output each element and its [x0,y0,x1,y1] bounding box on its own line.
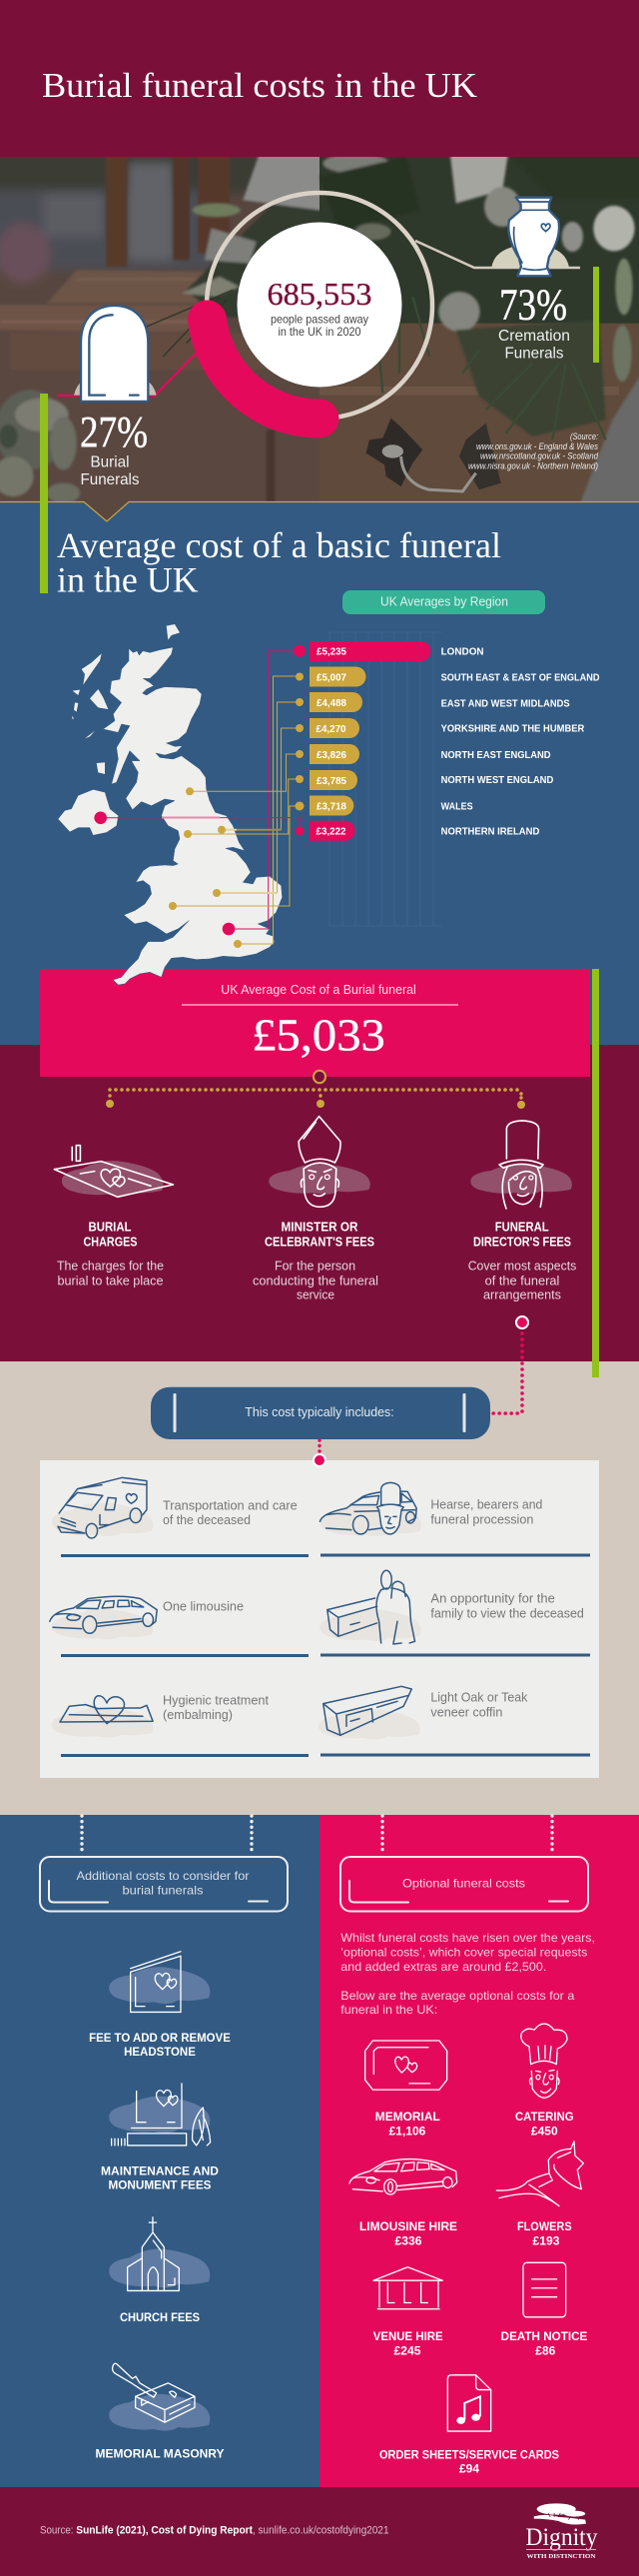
connector: cremation [415,241,580,268]
item: coffin [319,1686,528,1739]
item: order sheets [379,2375,559,2476]
row: London: LONDON [441,646,484,658]
pink donut segment [208,320,320,419]
regional connector lines [101,651,300,944]
column: minister fees [253,1117,378,1302]
source note: (Source: [570,431,598,442]
heading: minister fees: MINISTER OR [282,1220,358,1235]
icon: limousine [349,2159,457,2194]
heading box: optional costs: Optional funeral costs [402,1876,525,1890]
item: venue hire [373,2267,443,2357]
label [375,2112,440,2139]
heading box: additional costs [40,1857,288,1912]
text: director fees: arrangements [483,1288,561,1302]
heading box: optional costs [340,1857,588,1912]
chart grid [329,632,442,926]
label [515,2112,574,2139]
intro text: and added extras are around £2,500. [340,1960,546,1974]
text: Light Oak or Teak [430,1691,528,1705]
text: burial charges: The charges for the [57,1260,164,1274]
label: MEMORIAL [375,2112,440,2124]
text [163,1694,270,1722]
icon: chisel and stone [109,2363,210,2431]
burial vs cremation statistics [57,193,599,488]
label: MAINTENANCE AND [101,2165,219,2177]
label: £1,106 [389,2127,425,2139]
source note: www.nisra.gov.uk - Northern Ireland) [468,461,598,472]
burial label: Funerals [80,471,140,488]
row: Northern Ireland [296,821,540,841]
text: of the deceased [163,1513,251,1527]
icon: headstone [74,306,157,402]
cremation label: Funerals [505,346,563,362]
UK map [58,624,283,985]
panel: optional costs [320,1815,639,2487]
heading: minister fees: CELEBRANT'S FEES [265,1234,374,1249]
burial percentage: 27% [80,408,148,456]
text: An opportunity for the [430,1592,555,1606]
Scottish islands [72,624,180,774]
label: ORDER SHEETS/SERVICE CARDS [379,2449,559,2461]
panel: additional costs [0,1815,320,2487]
item: embalming [52,1694,270,1738]
wordmark: Dignity [525,2524,598,2551]
intro text: funeral in the UK: [340,2003,437,2017]
heading: burial charges: CHARGES [84,1234,138,1249]
heading box: additional costs: burial funerals [122,1884,204,1898]
heading: burial charges: BURIAL [88,1220,132,1235]
label [379,2449,559,2476]
item: family viewing [320,1570,584,1644]
text [430,1498,542,1527]
text: Hygienic treatment [163,1694,270,1708]
row: South East [296,667,600,687]
deaths caption [271,312,368,339]
row: Wales: WALES [441,801,473,813]
map markers [94,787,242,948]
row: North West: £3,785 [317,775,346,787]
label: CATERING [515,2112,574,2124]
item: memorial masonry [96,2363,225,2460]
source line: , sunlife.co.uk/costofdying2021 [253,2525,389,2537]
logo: Dignity [525,2503,598,2560]
icon: music file [447,2375,491,2431]
item: memorial [365,2041,447,2139]
icon: venue [373,2267,442,2309]
average cost box [40,969,590,1077]
deaths caption: in the UK in 2020 [278,325,361,339]
item: headstone fee [89,1952,231,2059]
label [373,2331,443,2357]
text: Transportation and care [163,1499,298,1513]
box caption: UK Average Cost of a Burial funeral [221,982,416,997]
bar chart: regional averages [294,641,600,841]
text: Hearse, bearers and [430,1498,542,1512]
tagline: WITH DISTINCTION [527,2553,596,2560]
text: veneer coffin [430,1705,502,1719]
item: catering [515,2024,574,2139]
row: Wales: £3,718 [317,801,346,813]
row: Northern Ireland: NORTHERN IRELAND [441,826,540,838]
intro text [340,1931,595,2017]
beige section background [0,1361,639,1815]
row: South East: SOUTH EAST & EAST OF ENGLAND [441,671,600,683]
row: South East: £5,007 [317,671,346,683]
icon: headstone [109,1952,210,2012]
icon: hygienic treatment [52,1696,153,1738]
connector: North West [188,779,300,834]
item: maintenance fees [101,2084,219,2192]
connector: North East [190,754,300,791]
row: North East: £3,826 [317,749,346,761]
heading box: additional costs: Additional costs to consider for [76,1869,250,1883]
item: ambulance [52,1477,298,1538]
header band [0,0,639,157]
icon: church [109,2217,210,2290]
connector: London [229,651,300,929]
label [89,2033,231,2059]
text [430,1691,528,1719]
item: church fees [109,2217,210,2324]
row: Yorkshire: £4,270 [316,723,346,735]
label: £94 [459,2464,480,2476]
donut ring [207,193,432,419]
pill: UK averages by region [342,590,545,614]
column: funeral director fees [468,1121,576,1302]
deaths figure: 685,553 [268,276,371,312]
heading: director fees [473,1220,571,1249]
icon: minister [269,1117,370,1207]
row: North East: NORTH EAST ENGLAND [441,749,551,761]
text: minister fees: For the person [275,1260,355,1274]
text [430,1592,584,1620]
deaths caption: people passed away [271,312,368,326]
row: Midlands: £4,488 [317,697,346,709]
burial label [80,453,140,488]
label: £193 [533,2235,559,2247]
heading: minister fees [265,1220,374,1249]
green accent bar: cremation [593,267,599,363]
green accent bar: left [40,394,48,593]
row: North West [296,770,554,790]
label: £245 [393,2345,421,2357]
row: Yorkshire [296,718,585,738]
section: average cost background [0,501,639,1045]
row: Midlands [296,692,570,712]
title: Burial funeral costs in the UK [42,66,477,105]
label: MONUMENT FEES [108,2180,212,2192]
column: burial charges [54,1146,173,1288]
centre circle [238,222,401,388]
label [501,2331,588,2357]
icon: coffin [319,1686,420,1739]
item: limousine [50,1596,244,1639]
text: director fees: Cover most aspects [468,1260,576,1274]
text: director fees [468,1260,576,1302]
label: FEE TO ADD OR REMOVE [89,2033,231,2045]
label: FLOWERS [517,2221,572,2233]
connector: Wales [173,806,300,906]
panel: included items [40,1440,599,1778]
label: MEMORIAL MASONRY [96,2448,225,2460]
icon: monument [109,2084,211,2146]
icon: memorial plaque [365,2041,447,2090]
row: Midlands: EAST AND WEST MIDLANDS [441,697,570,709]
label: £86 [535,2345,555,2357]
pill: UK averages by region: UK Averages by Region [380,594,508,609]
connector: Northern Ireland [101,817,300,831]
source line: Source: [40,2525,74,2537]
row: Wales [296,795,473,815]
burial label: Burial [90,453,130,471]
intro text: Whilst funeral costs have risen over the years, [340,1931,595,1945]
item: hearse [320,1482,542,1536]
maroon section background [0,1045,639,1361]
heading: burial charges [84,1220,138,1249]
icon: family at coffin [320,1570,421,1644]
source line: SunLife (2021), Cost of Dying Report [76,2525,253,2537]
cremation percentage: 73% [499,280,567,330]
intro text: ‘optional costs’, which cover special requests [340,1946,587,1960]
text: funeral procession [430,1513,533,1527]
label [101,2165,219,2192]
row: North West: NORTH WEST ENGLAND [441,774,554,786]
row: North East [296,744,551,764]
icon: private ambulance [52,1477,153,1538]
cremation label: Cremation [498,328,570,345]
text: burial charges [57,1260,164,1288]
connector: Yorkshire [222,728,300,830]
icon: burial plot [54,1146,173,1197]
average cost figure: £5,033 [252,1011,385,1061]
label: VENUE HIRE [373,2331,443,2343]
row: London: £5,235 [317,646,346,658]
text: burial charges: burial to take place [58,1275,164,1288]
connector: Midlands [217,702,300,893]
text: One limousine [163,1600,244,1614]
text: minister fees [253,1260,378,1302]
row: Northern Ireland: £3,222 [316,826,346,838]
label: DEATH NOTICE [501,2331,588,2343]
icon: limousine [50,1596,157,1639]
banner: this cost typically includes [151,1387,490,1439]
text: (embalming) [163,1708,233,1722]
row: Yorkshire: YORKSHIRE AND THE HUMBER [441,723,585,735]
icon: flowers [496,2142,583,2206]
section heading: Average cost of a basic funeral [57,525,501,565]
icon: hearse and bearer [320,1482,421,1536]
icon: chef [521,2024,567,2098]
logo tree [534,2503,586,2525]
text: minister fees: service [297,1288,334,1302]
gold dotted connector [106,1071,525,1109]
Great Britain [103,647,283,985]
label: LIMOUSINE HIRE [359,2221,457,2233]
row: London [294,641,484,661]
heading: director fees: FUNERAL [495,1220,549,1235]
label: HEADSTONE [124,2047,196,2059]
source note: www.ons.gov.uk - England & Wales [476,441,598,452]
cremation label [498,328,570,362]
intro text: Below are the average optional costs for a [340,1989,575,2003]
Northern Ireland [58,790,118,835]
section heading [57,525,501,600]
footer [0,2487,639,2576]
label: CHURCH FEES [120,2312,200,2324]
icon: notice [523,2262,566,2317]
icon: urn [491,198,569,276]
source note: www.nrscotland.gov.uk - Scotland [480,451,599,462]
label [359,2221,457,2247]
connector line to burial [57,353,197,396]
section heading: in the UK [57,560,199,600]
text [163,1499,298,1527]
heading: director fees: DIRECTOR'S FEES [473,1234,571,1249]
icon: funeral director [470,1121,572,1209]
green accent bar: right [592,969,599,1377]
item: limousine hire [349,2159,457,2247]
item: death notice [501,2262,588,2357]
text: director fees: of the funeral [485,1275,559,1288]
label [517,2221,572,2247]
source line [40,2525,389,2537]
item: flowers [496,2142,583,2247]
pink dotted connector [492,1316,528,1413]
label: £336 [395,2235,421,2247]
photo background: coffin and flowers [0,137,639,531]
connector: South East [238,676,300,944]
banner: this cost typically includes: This cost typically includes: [245,1404,394,1419]
source note [468,431,599,472]
text: minister fees: conducting the funeral [253,1275,378,1288]
text: family to view the deceased [430,1606,584,1620]
label: £450 [531,2127,558,2139]
